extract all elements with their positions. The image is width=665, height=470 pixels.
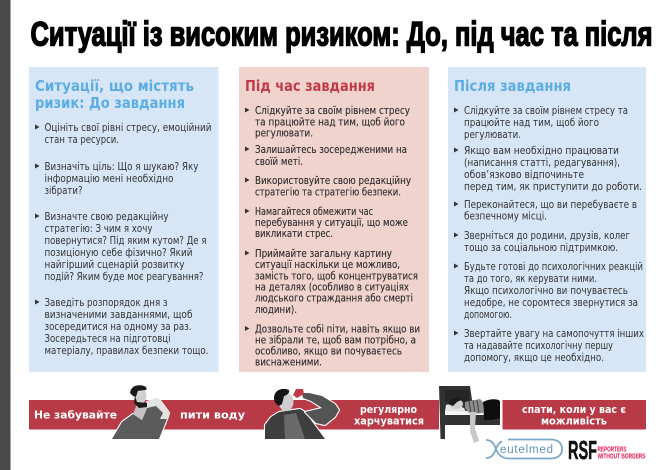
bullet: daily routine: Зосередьтеся на підготовці (44, 333, 170, 345)
bullet: big picture: на деталях (особливо в ситуаціях (255, 282, 409, 294)
bullet: big picture: Приймайте загальну картину (255, 248, 392, 260)
banner text: sleep when possible (522, 403, 626, 428)
bullet: monitor stress: регулювати. (255, 128, 313, 140)
bullet: use strategy: Використовуйте свою редакційну (255, 175, 411, 187)
bullet: define goal: зібрати? (44, 185, 82, 197)
banner text: sleep when possible: можливість (541, 414, 607, 428)
logo: RSF Reporters Without Borders (568, 435, 646, 465)
bullet: daily routine: визначеними завданнями, щоб (44, 309, 192, 321)
heading: before the task: ризик: До завдання (35, 94, 185, 112)
bullet: monitor stress: Слідкуйте за своїм рівнем стресу (255, 105, 410, 117)
bullet: monitor stress: Слідкуйте за своїм рівнем стресу та (464, 105, 628, 117)
bullet: big picture: людського страждання або смерті (255, 292, 413, 304)
bullet: allow yourself to leave: особливо, якщо ви почуваєтесь (255, 346, 402, 358)
banner text: do not forget: Не забувайте (34, 408, 117, 422)
bullet: daily routine: матеріалу, правилах безпеки тощо. (44, 345, 208, 357)
bullet: monitor stress: працюйте над тим, щоб його (464, 117, 599, 129)
bullet: limit time: Намагайтеся обмежити час (255, 206, 373, 218)
bullet: wellbeing of others: та надавайте психологічну першу (464, 340, 613, 352)
bullet: allow yourself to leave (245, 324, 420, 368)
bullet: social support (454, 230, 630, 254)
banner text: eat regularly: харчуватися (354, 414, 424, 428)
bullet: daily routine (35, 297, 208, 357)
bullet: use strategy: стратегію та стратегію безпеки. (255, 186, 401, 198)
bullet: define goal: Визначіть ціль: Що я шукаю? Яку (44, 161, 198, 173)
heading: after the task: Після завдання (454, 77, 571, 95)
heading: during the task: Під час завдання (245, 77, 375, 95)
heading: before the task: Ситуації, що містять (35, 77, 194, 95)
icon: person sleeping on bed (439, 386, 502, 443)
bullet: rest before work: обов’язково відпочиньте (464, 169, 584, 181)
bullet: assess stress: стан та ресурси. (44, 134, 119, 146)
bullet: limit time (245, 206, 408, 240)
bullet: monitor stress (454, 105, 628, 141)
bullet: social support: тощо за соціальною підтримкою. (464, 242, 618, 254)
bullet: rest before work: Якщо вам необхідно працювати (464, 145, 619, 157)
bullet: big picture: ситуації наскільки це можливо, (255, 259, 400, 271)
bullet: big picture: замість того, щоб концентруватися (255, 270, 418, 282)
bullet: editorial strategy: найгірший сценарій розвитку (44, 259, 184, 271)
bullet: wellbeing of others: допомогу, якщо це необхідно. (464, 352, 604, 364)
left grey strip (0, 0, 10, 470)
bullet: monitor stress (245, 105, 410, 140)
bullet: safe place (454, 199, 637, 222)
bullet: stay focused: своїй меті. (255, 156, 303, 168)
banner text: eat regularly: регулярно (360, 403, 417, 416)
bullet: define goal (35, 161, 198, 197)
icon: man eating (265, 389, 339, 439)
heading: before the task (35, 77, 194, 112)
banner: reminders (29, 400, 646, 430)
panel: after the task (448, 67, 646, 372)
bullet: editorial strategy: повернутися? Під яким кутом? Де я (44, 235, 206, 247)
bullet: assess stress (35, 122, 212, 146)
bullet: limit time: викликати стрес. (255, 228, 333, 240)
bullet: editorial strategy: стратегію: З чим я хочу (44, 223, 152, 235)
bullet: editorial strategy (35, 211, 206, 283)
bullet: psychological reactions: та до того, як керувати ними. (464, 273, 597, 285)
bullet: allow yourself to leave: Дозвольте собі піти, навіть якщо ви (255, 324, 420, 336)
banner text: sleep when possible: спати, коли у вас є (522, 403, 626, 416)
banner text: eat regularly (354, 403, 424, 428)
bullet: editorial strategy: Визначте свою редакційну (44, 211, 168, 223)
bullet: editorial strategy: подій? Яким буде моє реагування? (44, 271, 204, 283)
bullet: allow yourself to leave: виснаженими. (255, 356, 322, 368)
bullet: safe place: безпечному місці. (464, 210, 547, 222)
bullet: use strategy (245, 175, 411, 198)
bullet: assess stress: Оцініть свої рівні стресу, емоційний (44, 122, 212, 134)
bullet: monitor stress: та працюйте над тим, щоб його (255, 116, 405, 128)
bullet: limit time: перебування у ситуації, що може (255, 217, 408, 229)
banner text: drink water: пити воду (180, 408, 245, 422)
bullet: psychological reactions: Якщо психологічно ви почуваєтесь (464, 285, 628, 297)
bullet: editorial strategy: позиціоную себе фізично? Який (44, 247, 192, 259)
logo: RSF Reporters Without Borders: RSF (568, 435, 597, 465)
bullet: daily routine: зосередитися на одному за раз. (44, 321, 192, 333)
bullet: allow yourself to leave: не зібрали те, щоб вам потрібно, а (255, 334, 416, 346)
bullet: wellbeing of others (454, 328, 644, 364)
icon: man drinking water (112, 385, 169, 439)
bullet: stay focused: Залишайтесь зосередженими на (255, 144, 407, 156)
bullet: monitor stress: регулювати. (464, 129, 521, 141)
bullet: big picture: людини). (255, 304, 297, 316)
bullet: big picture (245, 248, 418, 316)
bullet: social support: Зверніться до родини, друзів, колег (464, 230, 630, 242)
panel: during the task (239, 67, 429, 372)
bullet: psychological reactions: допомогою. (464, 309, 512, 321)
bullet: psychological reactions (454, 261, 643, 321)
logo: eutelmed (486, 440, 562, 458)
logo: RSF Reporters Without Borders: REPORTERS (598, 444, 626, 454)
bullet: stay focused (245, 144, 407, 168)
bullet: rest before work: (написання статті, редагування), (464, 157, 620, 169)
bullet: daily routine: Заведіть розпорядок дня з (44, 297, 168, 309)
bullet: rest before work (454, 145, 642, 193)
logo: eutelmed: eutelmed (500, 444, 553, 456)
bullet: define goal: інформацію мені необхідно (44, 173, 174, 185)
panel: before the task (29, 67, 218, 372)
